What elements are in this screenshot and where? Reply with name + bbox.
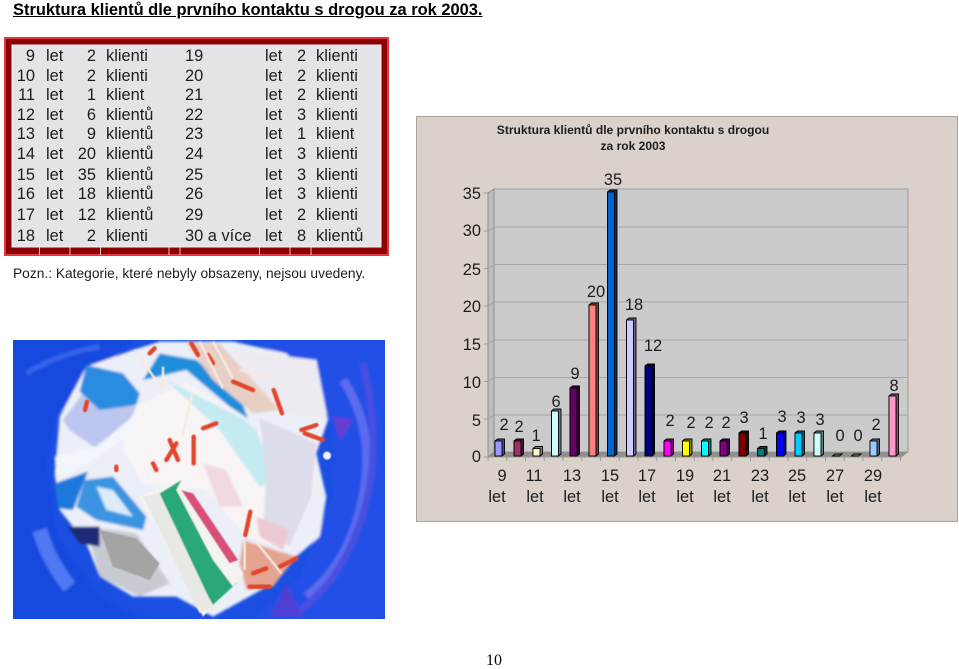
table row 17 / 29 [17, 206, 358, 224]
x axis labels: 13 [563, 467, 581, 485]
bar value labels: 20 [587, 283, 605, 301]
table row 16 / 26: let [46, 185, 64, 203]
table row 12 / 22: let [265, 106, 283, 124]
table row 13 / 23 [17, 125, 355, 143]
table row 18 / 30 a více [17, 227, 363, 245]
x axis labels: 15 [601, 467, 619, 485]
x axis labels: let [751, 488, 769, 506]
y axis labels: 35 [463, 185, 481, 203]
table row 16 / 26: klientů [106, 185, 153, 203]
bar age 19 [682, 439, 692, 456]
table row 12 / 22: klientů [106, 106, 153, 124]
table row 12 / 22: 3 [297, 106, 306, 124]
bar age 29 [870, 439, 880, 456]
bar value labels: 2 [704, 414, 714, 432]
y axis labels: 15 [463, 336, 481, 354]
table row 17 / 29: klienti [316, 206, 358, 224]
y axis labels: 25 [463, 261, 481, 279]
table row 11 / 21: let [46, 86, 64, 104]
table row 13 / 23: 23 [185, 125, 203, 143]
bar value labels: 3 [777, 408, 787, 426]
bar value labels: 3 [815, 411, 825, 429]
x axis labels: let [526, 488, 544, 506]
table row 13 / 23: klient [316, 125, 355, 143]
table row 17 / 29: 17 [17, 206, 35, 224]
bar value labels: 2 [871, 416, 881, 434]
bar value labels: 9 [570, 365, 580, 383]
chart title: Struktura klientů dle prvního kontaktu s drogou [497, 123, 769, 137]
bar age 10 [514, 439, 524, 456]
y axis labels: 20 [463, 298, 481, 316]
y axis labels: 30 [463, 222, 481, 240]
table row 17 / 29: let [46, 206, 64, 224]
bar age 30+ [889, 394, 898, 456]
table row 10 / 20: 2 [87, 67, 96, 85]
table row 10 / 20: let [46, 67, 64, 85]
table row 9 / 19 [26, 47, 358, 65]
bar age 11 [533, 446, 542, 456]
x axis labels: 23 [751, 467, 769, 485]
bar age 26 [814, 431, 824, 456]
bar value labels: 2 [514, 418, 524, 436]
table row 9 / 19: 2 [87, 47, 96, 65]
table row 14 / 24: 14 [17, 145, 35, 163]
bar value labels: 2 [686, 414, 696, 432]
table row 14 / 24: 24 [185, 145, 203, 163]
bar value labels: 3 [796, 409, 806, 427]
table row 11 / 21 [18, 86, 358, 104]
table row 9 / 19: 9 [26, 47, 35, 65]
table row 18 / 30 a více: 30 a více [185, 227, 252, 245]
table row 18 / 30 a více: 2 [87, 227, 96, 245]
table row 12 / 22: 22 [185, 106, 203, 124]
bar age 9 [495, 439, 504, 456]
table row 12 / 22 [17, 106, 358, 124]
x axis labels: let [601, 488, 619, 506]
table row 11 / 21: 21 [185, 86, 203, 104]
table row 17 / 29: 29 [185, 206, 203, 224]
table row 14 / 24 [17, 145, 358, 163]
bar age 15 [608, 190, 617, 456]
table row 10 / 20: klienti [106, 67, 148, 85]
table row 18 / 30 a více: let [265, 227, 283, 245]
bar value labels: 18 [625, 296, 643, 314]
table row 18 / 30 a více: klienti [106, 227, 148, 245]
table row 12 / 22: klienti [316, 106, 358, 124]
chart title [497, 123, 769, 153]
table row 16 / 26: 26 [185, 185, 203, 203]
table row 12 / 22: 12 [17, 106, 35, 124]
x axis labels: let [563, 488, 581, 506]
table row 16 / 26: 3 [297, 185, 306, 203]
bar age 27 [832, 454, 842, 456]
x axis labels: 29 [864, 467, 882, 485]
page number: 10 [486, 652, 502, 669]
table row 10 / 20 [17, 67, 358, 85]
table row 11 / 21: klient [106, 86, 145, 104]
table row 15 / 25: klientů [106, 166, 153, 184]
table row 17 / 29: 12 [78, 206, 96, 224]
bar value labels: 0 [835, 427, 845, 445]
bar value labels: 1 [758, 425, 768, 443]
table row 15 / 25: let [265, 166, 283, 184]
bar value labels: 8 [889, 377, 899, 395]
table row 11 / 21: 11 [18, 86, 35, 104]
bar age 20 [702, 439, 711, 456]
x axis labels: 11 [525, 467, 543, 485]
table row 15 / 25: 15 [17, 166, 35, 184]
table row 9 / 19: 2 [297, 47, 306, 65]
table row 11 / 21: klienti [316, 86, 358, 104]
table row 15 / 25: 25 [185, 166, 203, 184]
bar age 14 [589, 303, 598, 456]
table row 11 / 21: let [265, 86, 283, 104]
bar age 25 [795, 431, 804, 456]
x axis labels: let [788, 488, 806, 506]
table row 13 / 23: 13 [17, 125, 35, 143]
table row 9 / 19: 19 [185, 47, 203, 65]
table row 18 / 30 a více: 18 [17, 227, 35, 245]
table row 9 / 19: klienti [106, 47, 148, 65]
bar age 13 [570, 386, 580, 456]
bar age 28 [852, 454, 861, 456]
x axis labels: let [638, 488, 656, 506]
table row 13 / 23: 9 [87, 125, 96, 143]
table row 17 / 29: let [265, 206, 283, 224]
bar age 17 [645, 364, 654, 456]
photo: syringes and plastic bags in a blue bin [13, 340, 385, 619]
x axis labels: let [826, 488, 844, 506]
table row 16 / 26: 16 [17, 185, 35, 203]
bar age 23 [758, 446, 767, 456]
table note: Pozn.: Kategorie, které nebyly obsazeny, nejsou uvedeny. [13, 266, 365, 281]
bar value labels: 0 [853, 427, 863, 445]
y axis labels: 0 [472, 448, 481, 466]
bar value labels [499, 171, 899, 445]
bar age 22 [739, 431, 748, 456]
x axis labels: let [864, 488, 882, 506]
table row 9 / 19: let [46, 47, 64, 65]
bar age 16 [626, 318, 636, 456]
table row 18 / 30 a více: 8 [297, 227, 306, 245]
table row 13 / 23: klientů [106, 125, 153, 143]
x axis labels: 21 [713, 467, 731, 485]
bar value labels: 2 [499, 416, 509, 434]
bar age 24 [776, 431, 786, 456]
table row 12 / 22: 6 [87, 106, 96, 124]
x axis labels: 17 [638, 467, 656, 485]
table row 15 / 25: 3 [297, 166, 306, 184]
x axis labels: let [488, 488, 506, 506]
table row 18 / 30 a více: let [46, 227, 64, 245]
chart title: za rok 2003 [601, 139, 666, 153]
y axis labels [463, 185, 481, 466]
table row 15 / 25 [17, 166, 358, 184]
x axis labels: 19 [676, 467, 694, 485]
table row 9 / 19: klienti [316, 47, 358, 65]
table row 15 / 25: klienti [316, 166, 358, 184]
table row 12 / 22: let [46, 106, 64, 124]
table row 16 / 26: 18 [78, 185, 96, 203]
table row 14 / 24: klienti [316, 145, 358, 163]
bar value labels: 35 [604, 171, 622, 189]
table row 11 / 21: 1 [87, 86, 96, 104]
table row 15 / 25: let [46, 166, 64, 184]
bar value labels: 12 [644, 337, 662, 355]
table row 10 / 20: 10 [17, 67, 35, 85]
bar age 21 [720, 439, 730, 456]
table row 16 / 26 [17, 185, 358, 203]
x axis labels: 9 [497, 467, 507, 485]
table row 17 / 29: 2 [297, 206, 306, 224]
x axis labels: let [713, 488, 731, 506]
table row 14 / 24: let [46, 145, 64, 163]
bar value labels: 3 [739, 409, 749, 427]
table row 14 / 24: klientů [106, 145, 153, 163]
table row 16 / 26: let [265, 185, 283, 203]
bar value labels: 1 [531, 427, 541, 445]
table row 17 / 29: klientů [106, 206, 153, 224]
bar value labels: 2 [665, 412, 675, 430]
x axis labels: 25 [788, 467, 806, 485]
table row 14 / 24: 20 [78, 145, 96, 163]
table row 14 / 24: let [265, 145, 283, 163]
main title: Struktura klientů dle prvního kontaktu s drogou za rok 2003. [13, 1, 482, 19]
table row 16 / 26: klienti [316, 185, 358, 203]
table row 10 / 20: klienti [316, 67, 358, 85]
table row 15 / 25: 35 [78, 166, 96, 184]
table row 11 / 21: 2 [297, 86, 306, 104]
bars [495, 190, 898, 456]
table row 9 / 19: let [265, 47, 283, 65]
table row 10 / 20: 20 [185, 67, 203, 85]
table row 10 / 20: let [265, 67, 283, 85]
y axis labels: 10 [463, 374, 481, 392]
x axis labels: 27 [826, 467, 844, 485]
plot area walls and gridlines [484, 189, 908, 461]
table row 13 / 23: let [265, 125, 283, 143]
table row 13 / 23: 1 [297, 125, 306, 143]
x axis labels: let [676, 488, 694, 506]
panel: age table [4, 37, 389, 256]
bar value labels: 6 [551, 393, 561, 411]
bar age 18 [664, 439, 674, 456]
table row 13 / 23: let [46, 125, 64, 143]
table row 14 / 24: 3 [297, 145, 306, 163]
table row 18 / 30 a více: klientů [316, 227, 363, 245]
x axis labels [488, 467, 882, 506]
y axis labels: 5 [472, 412, 481, 430]
table row 10 / 20: 2 [297, 67, 306, 85]
bar age 12 [552, 409, 561, 456]
bar value labels: 2 [721, 414, 731, 432]
